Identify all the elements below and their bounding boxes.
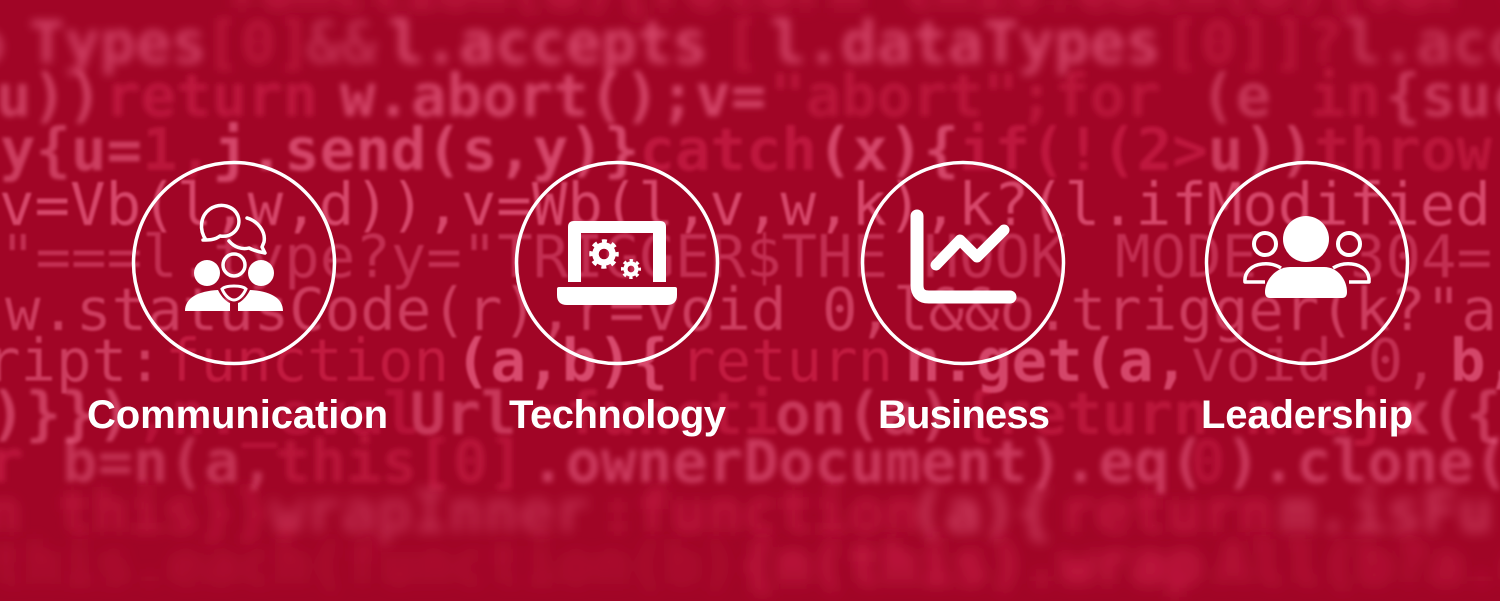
background: blurred code lines: this.each(function(b): [0, 529, 736, 598]
background: blurred code lines: ,n._eval: [135, 379, 419, 448]
icon ring: leadership: [1206, 162, 1408, 364]
background: blurred code lines: m.isFu: [1280, 477, 1493, 546]
background: blurred code lines: {return n.aja: [960, 379, 1422, 448]
background: blurred code lines: in: [1310, 61, 1381, 130]
icon: laptop with gears: [557, 221, 677, 305]
background: blurred code lines: 304=: [1350, 222, 1492, 291]
background: blurred code lines: return: [680, 326, 893, 395]
background: blurred code lines: (a){: [910, 477, 1052, 546]
background: blurred code lines: on(a): [775, 379, 953, 448]
icon ring: business: [862, 162, 1064, 364]
icon ring: technology: [516, 162, 718, 364]
background: blurred code lines: y{u=1,j.send(s,y)}catch(x){if(!(2>u))throw: [0, 115, 1492, 184]
background: blurred code lines: Types: [29, 8, 207, 77]
background: blurred code lines: w.statusCode(r),r=void 0,l&&o.trigger(k?"a: [5, 275, 1497, 344]
background: blurred code lines: .ownerDocument).eq(: [530, 427, 1205, 496]
background: blurred code lines: "abort";for: [770, 61, 1161, 130]
icon: team with leader: [1245, 216, 1369, 298]
background: blurred code lines: v=Vb(l,w,d)),v=Wb(l,v,w,k),k?(l.ifModified: [0, 170, 1491, 239]
background: blurred code lines: &&: [306, 8, 378, 77]
panel: leadership: [1201, 162, 1413, 437]
background: blurred code lines: b=n(a,: [62, 427, 275, 496]
background: blurred code lines: 0: [1190, 427, 1226, 496]
icon: people talking: [185, 205, 283, 311]
background: blurred code lines: this[0]: [275, 427, 524, 496]
background: blurred code lines: [: [725, 8, 761, 77]
panel: business: [862, 162, 1064, 437]
background: blurred code lines: return: [1060, 477, 1273, 546]
background: blurred code lines: w.abort();v=: [340, 61, 766, 130]
panel: communication: [87, 162, 388, 437]
background: blurred code lines: [0]: [205, 8, 312, 77]
background: blurred code lines: (a,b){: [455, 326, 668, 395]
label: Business: Business: [878, 393, 1050, 437]
background: blurred code lines: "===l.type?y="TRIGGER$THE HOOK: [0, 222, 1101, 291]
background: blurred code lines: n.get(a,: [905, 326, 1189, 395]
background: blurred code lines: x({: [1395, 379, 1500, 448]
background: blurred code lines: wrapInner: [270, 477, 590, 546]
background: blurred code lines: (e: [1200, 61, 1271, 130]
icon: line chart: [917, 216, 1010, 297]
background: blurred code lines: l.accepts: [388, 8, 708, 77]
label: Leadership: Leadership: [1201, 393, 1413, 437]
background: blurred code lines: :function: [600, 477, 920, 546]
background: blurred code lines: {n(this).wrap: [740, 529, 1202, 598]
icon ring: communication: [134, 162, 334, 364]
background: blurred code lines: function: [165, 326, 449, 395]
background: blurred code lines: MODE: [1115, 222, 1257, 291]
background: blurred code lines: =functi: [530, 379, 779, 448]
background: blurred code lines: l.dataTypes: [770, 8, 1161, 77]
background: blurred code lines: return: [105, 61, 318, 130]
label: Communication: Communication: [87, 393, 388, 437]
background: blurred code lines: void 0,: [1190, 326, 1439, 395]
label: Technology: Technology: [509, 393, 727, 437]
background: blurred code lines: [0]]?: [1165, 8, 1343, 77]
background: blurred code lines: Url: [410, 379, 517, 448]
panel: technology: [509, 162, 727, 437]
